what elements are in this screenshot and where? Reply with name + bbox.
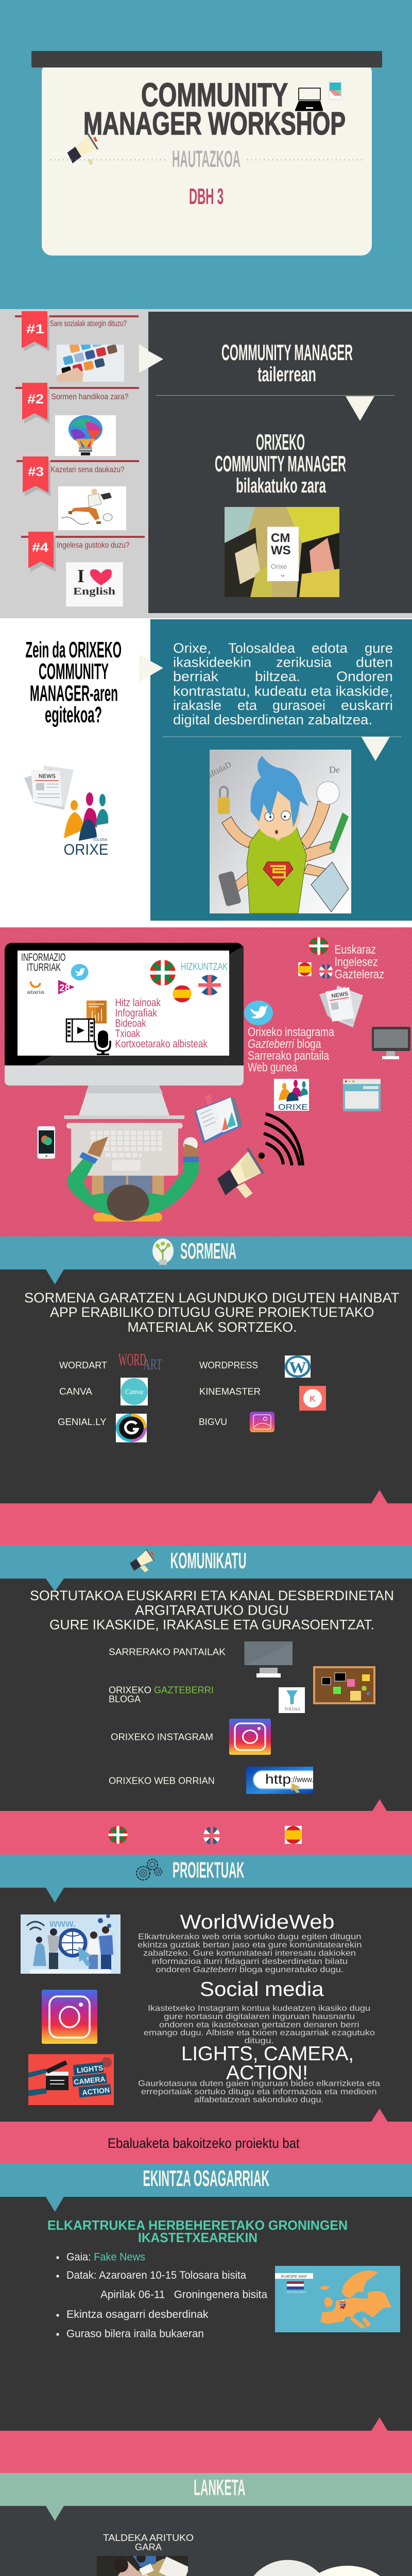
label: canva: CANVA: [59, 1386, 92, 1397]
text: role description: gure: [365, 640, 393, 656]
panel: questions column: [0, 309, 412, 618]
logo: wordart: WORD: [118, 1350, 146, 1369]
heading: orixeko community manager: bilakatuko zara: [236, 474, 326, 497]
ribbon 3: [16, 456, 139, 496]
label: kinemaster: KINEMASTER: [199, 1386, 261, 1397]
logo: Orixe Tolosa: TOLOSA: [93, 838, 108, 842]
logo: 28 tv: [58, 980, 75, 994]
image: lights camera action: LIGHTS: [76, 2063, 104, 2075]
logo: wordpress: W: [289, 1358, 306, 1377]
section band: lanketa: LANKETA: [194, 2475, 245, 2500]
label: screens: SARRERAKO PANTAILAK: [109, 1647, 226, 1657]
list: exchange details: Gaia: Fake News: [66, 2251, 145, 2263]
hands: [88, 1137, 108, 1157]
image: social media keyboard: [57, 345, 124, 382]
heading: role question: egitekoa?: [45, 702, 102, 727]
text: intro: GURE IKASKIDE, IRAKASLE ETA GURASOENTZAT.: [49, 1617, 374, 1632]
question 1: Sare sozialak atsegin dituzu?: [50, 319, 127, 328]
text: web description: ekintza guztiak bertan jaso eta gure komunitatearekin: [138, 1941, 362, 1950]
label: group work: [103, 2533, 194, 2552]
icon: browser window: [343, 1079, 381, 1111]
icon: phone: [329, 81, 341, 99]
icon: newspaper: [24, 766, 74, 810]
panel: komunikatu channels: [0, 1579, 412, 1811]
flag: UK: [198, 975, 221, 995]
hair: [250, 756, 308, 827]
panel: workshop intro: [148, 312, 412, 613]
list: exchange details: Ekintza osagarri desberdinak: [66, 2309, 209, 2320]
title: COMMUNITY: [141, 76, 288, 113]
pointer: pink triangle: [372, 1799, 387, 1811]
heading: role question: COMMUNITY: [39, 659, 109, 684]
body: [67, 1155, 199, 1217]
text: intro: ARGITARATUKO DUGU: [135, 1602, 289, 1618]
person typing: [67, 1137, 199, 1222]
illustration: speech bubbles: [243, 2560, 397, 2576]
text: role description: berriak: [173, 669, 219, 684]
flag: Spain: [173, 985, 192, 1003]
card: [267, 527, 299, 581]
panel: title cover: HAUTAZKOA: [172, 146, 241, 172]
logo: kinemaster: [299, 1386, 326, 1411]
icon: sound waves: [259, 1114, 303, 1165]
cream poster sheet: [42, 62, 372, 256]
image: CMWS collage: Orixe: [271, 563, 287, 570]
arrow: right triangle tip: [150, 661, 163, 675]
label: bigvu: BIGVU: [199, 1417, 227, 1427]
heading: role question: [26, 637, 122, 727]
logo: Orixe Tolosa: [64, 792, 108, 858]
label: information sources: INFORMAZIO: [21, 952, 66, 963]
arrow: intro pointer tip: [148, 351, 163, 368]
section band: ekintza osagarriak: [0, 2164, 412, 2197]
heading: orixeko community manager: [215, 430, 346, 497]
text: video description: Gaurkotasuna duten gaien inguruan bideo elkarrizketa eta: [138, 2079, 380, 2088]
pointer: pink triangle: [371, 2417, 387, 2431]
image: http address bar: [246, 1767, 314, 1794]
text: social description: ondoren eta ikastetxean gertatzen denaren berri: [159, 2021, 359, 2029]
list: publication channels: Orixeko instagrama: [248, 1025, 335, 1039]
panel: title cover: [0, 0, 412, 309]
logo: Tolosa: [279, 1687, 305, 1713]
band: project note: Ebaluaketa bakoitzeko proiektu bat: [108, 2136, 300, 2151]
icon: phone with chat: [37, 1126, 55, 1159]
ribbon 1: [15, 311, 139, 351]
heading: social media: Social media: [200, 1978, 324, 2001]
image: http address bar: ://www.: [291, 1775, 314, 1784]
pencil: [329, 812, 349, 853]
text: social description: [144, 2004, 375, 2045]
list: languages: Gazteleraz: [335, 968, 384, 981]
heading: exchange title: IKASTETXEAREKIN: [138, 2230, 258, 2245]
text: social description: gure nortasun digitalaren inguruan hausnartu: [164, 2012, 355, 2021]
label: instagram: ORIXEKO INSTAGRAM: [111, 1732, 213, 1742]
image: reporter running: [58, 486, 126, 530]
text: intro: APP ERABILIKO DITUGU GURE PROIEKTUETAKO: [50, 1304, 374, 1320]
list: publication channels: Web gunea: [248, 1060, 298, 1075]
logo: canva: Canva: [125, 1388, 143, 1396]
text: video description: [138, 2079, 380, 2105]
text: web description: informazioa iturri fidagarri desberdinetan bilatu: [152, 1957, 348, 1966]
list: exchange details: Datak: Azaroaren 10-15 Tolosara bisita: [66, 2269, 246, 2281]
text: intro: [24, 1290, 400, 1335]
list: publication channels: [248, 1025, 335, 1075]
text: role description: eta: [237, 698, 258, 713]
logo: Orixe small: ORIXE: [278, 1103, 308, 1112]
list: exchange details: Apirilak 06-11 Groningenera bisita: [100, 2289, 267, 2301]
arms: [222, 817, 253, 848]
text: role description: Ondoren: [336, 669, 393, 684]
text: role description: euskarri: [341, 698, 393, 713]
text: video description: alfabetatzean sakonduko dugu.: [194, 2096, 324, 2105]
chair: [93, 1213, 162, 1222]
image: lights camera action: ACTION: [82, 2086, 110, 2097]
image: lights camera action: CAMERA: [73, 2075, 106, 2086]
icon: newspaper on pink: NEWS: [331, 991, 349, 999]
face: [255, 791, 300, 838]
icon: megaphone: [67, 133, 98, 165]
phone: [218, 871, 242, 907]
panel: sormena apps: [0, 1269, 412, 1503]
label: genially: GENIAL.LY: [58, 1417, 107, 1427]
text: role description: edota: [312, 640, 348, 656]
text: social description: ditugu.: [244, 2037, 274, 2045]
image: http address bar: http: [265, 1771, 291, 1787]
pointer: pink triangle: [371, 2108, 387, 2122]
text: role description: gurasoei: [272, 698, 325, 713]
text: web description: [138, 1933, 362, 1974]
list: content formats: Hitz lainoak: [115, 997, 161, 1009]
panel: projects: [0, 1888, 412, 2122]
text: web description: ondoren Gazteberri bloga eguneratuko dugu.: [156, 1965, 344, 1974]
image: multitasking superhero: De: [329, 765, 340, 775]
logo: ataria: ataria: [27, 990, 45, 995]
icon: cork board: [313, 1666, 375, 1704]
text: role description: irakasle: [173, 698, 221, 713]
label: wordpress: WORDPRESS: [199, 1360, 258, 1370]
icon: microphone: [95, 1030, 110, 1055]
list: exchange details: Guraso bilera iraila bukaeran: [66, 2328, 204, 2340]
text: role description: Orixe,: [173, 640, 211, 656]
title: [83, 76, 346, 142]
logo: canva: [121, 1378, 148, 1405]
icon: laptop: [295, 88, 323, 111]
label: blog: [109, 1685, 214, 1704]
label: information sources: [21, 952, 66, 974]
label: group work: GARA: [135, 2542, 162, 2552]
question 3: Kazetari sena daukazu?: [50, 466, 125, 474]
logo: kinemaster: K: [310, 1395, 316, 1403]
section band: lanketa: [0, 2473, 412, 2506]
logo: wordart: ART: [143, 1356, 162, 1373]
icon: film strip: [66, 1019, 94, 1042]
head: [107, 1185, 149, 1221]
heading: lights camera action: ACTION!: [226, 2062, 308, 2084]
text: intro: SORTUTAKOA EUSKARRI ETA KANAL DESBERDINETAN: [30, 1588, 394, 1603]
section band: proiektuak: [0, 1855, 412, 1888]
image: Europe map: [275, 2266, 400, 2332]
list: publication channels: Gazteberri bloga: [248, 1037, 321, 1051]
text: intro: MATERIALAK SORTZEKO.: [128, 1319, 297, 1335]
label: information sources: ITURRIAK: [27, 961, 61, 974]
shield: [263, 862, 293, 886]
image: students around table: [97, 2556, 188, 2576]
text: web description: zabaltzeko. Gure komunitateari interesatu dakioken: [143, 1949, 356, 1958]
flag: UK small: [319, 964, 333, 979]
flag: UK: [203, 1826, 220, 1845]
list: publication channels: Sarrerako pantaila: [248, 1049, 330, 1063]
heading: exchange title: [47, 2217, 348, 2245]
image: creative light bulb: [55, 415, 116, 456]
icon: monitor small: [372, 1027, 410, 1059]
section band: sormena: [0, 1236, 412, 1269]
band: pink divider: [0, 2431, 412, 2473]
heading: worldwideweb: WorldWideWeb: [180, 1911, 335, 1934]
list: content formats: [115, 997, 208, 1050]
panel: role description: [150, 619, 412, 921]
course label: DBH 3: [189, 184, 224, 209]
list: content formats: Bideoak: [115, 1018, 146, 1029]
text: role description: digital desberdinetan zabaltzea.: [173, 712, 372, 727]
icon: chart document: [87, 1001, 107, 1023]
panel: desktop scene: [0, 927, 412, 1236]
ribbon 2: [15, 383, 139, 423]
image: www community: www.: [49, 1918, 76, 1929]
flag: basque top: [309, 937, 329, 955]
panel: lanketa: [0, 2506, 412, 2576]
padlock: [218, 797, 230, 814]
list: languages: Ingelesez: [335, 955, 378, 969]
label: web: ORIXEKO WEB ORRIAN: [109, 1776, 215, 1786]
band: language flags: [0, 1811, 412, 1855]
text: role description: duten: [356, 655, 393, 670]
image: I love English: English: [73, 586, 115, 597]
list: content formats: Infografiak: [115, 1007, 157, 1019]
text: role description: zerikusia: [276, 655, 332, 670]
logo: genially: [116, 1414, 147, 1443]
list: content formats: Txioak: [115, 1028, 140, 1040]
logo: Tolosa: TOLOSA: [284, 1707, 301, 1711]
keyboard laptop: [66, 1123, 183, 1176]
heading: lights camera action: [181, 2043, 354, 2084]
logo: instagram: [229, 1719, 271, 1755]
panel: role: [0, 618, 412, 927]
heading: role question: Zein da ORIXEKO: [26, 637, 122, 663]
image: CMWS collage: WS: [271, 544, 291, 557]
list: languages: Euskaraz: [335, 943, 376, 957]
arrow: down triangle: [346, 396, 374, 421]
pointer: pink triangle: [371, 1490, 387, 1503]
text: role description: [173, 640, 393, 727]
icon: open book: [195, 1093, 242, 1144]
icon: gears: [136, 1859, 162, 1880]
flag: Spain: [285, 1826, 302, 1844]
text: intro: SORMENA GARATZEN LAGUNDUKO DIGUTEN HAINBAT: [24, 1290, 400, 1306]
section band: proiektuak: PROIEKTUAK: [173, 1858, 245, 1883]
logo: wordpress: [285, 1355, 311, 1378]
icon: monitor: [244, 1641, 293, 1677]
text: role description: biltzea.: [255, 669, 300, 684]
section band: sormena: SORMENA: [180, 1239, 236, 1264]
logo: bigvu: [250, 1412, 274, 1432]
question 2: Sormen handikoa zara?: [52, 393, 129, 401]
text: role description: ikaskideekin: [173, 655, 251, 670]
arrow: right triangle: [139, 344, 163, 373]
image: CMWS collage: [225, 507, 339, 597]
heading: exchange title: ELKARTRUKEA HERBEHERETAKO GRONINGEN: [47, 2217, 348, 2233]
label: languages: HIZKUNTZAK: [181, 961, 228, 973]
text: intro: [30, 1588, 394, 1632]
section band: komunikatu: [0, 1546, 412, 1579]
label: group work: TALDEKA ARITUKO: [103, 2533, 194, 2543]
arrow: right triangle: [139, 654, 163, 682]
text: web description: Elkartrukerako web orria sortuko dugu egiten ditugun: [138, 1933, 362, 1941]
section band: komunikatu: KOMUNIKATU: [170, 1548, 247, 1573]
section band: ekintza osagarriak: EKINTZA OSAGARRIAK: [143, 2166, 269, 2191]
monitor: [5, 943, 244, 1119]
logo: ataria: [27, 981, 45, 995]
logo: 28 tv: 28: [59, 983, 70, 994]
icon: tree bulb: [152, 1239, 174, 1265]
logo: Orixe small: [274, 1079, 309, 1112]
band: project note: [0, 2122, 412, 2164]
text: role description: Tolosaldea: [228, 640, 296, 656]
heading: role question: MANAGER-aren: [30, 681, 118, 706]
tablet: [311, 862, 349, 912]
text: video description: erreportaiak sortuko ditugu eta informazioa eta medioen: [141, 2088, 377, 2096]
icon: newspaper: NEWS: [39, 773, 56, 779]
ribbon 3: #3: [28, 465, 44, 479]
band: pink divider: [0, 1503, 412, 1546]
screen: [18, 951, 229, 1056]
text: role description: kontrastatu, kudeatu eta ikaskide,: [173, 684, 393, 699]
panel: exchange: [0, 2197, 412, 2431]
shirt: [247, 826, 306, 913]
image: I love English: [66, 562, 123, 607]
crumpled paper: [317, 782, 339, 804]
heading: tailerrean: tailerrean: [258, 363, 316, 386]
label: wordart: WORDART: [59, 1360, 107, 1370]
image: Europe map: NETHERLANDS: [287, 2291, 306, 2294]
label: blog: BLOGA: [109, 1694, 141, 1704]
logo: Orixe Tolosa: ORIXE: [64, 841, 108, 858]
flag: Spain square: [298, 962, 312, 976]
image: lights camera action: [28, 2054, 114, 2105]
image: Europe map: EUROPE MAP: [281, 2274, 307, 2279]
icon: twitter: [244, 1001, 273, 1025]
icon: newspaper on pink: [319, 986, 363, 1027]
heading: lights camera action: LIGHTS, CAMERA,: [181, 2043, 354, 2065]
question 4: Ingelesa gustoko duzu?: [57, 541, 130, 550]
image: CMWS collage: CM: [271, 531, 290, 545]
logo: instagram large: [42, 1990, 97, 2044]
image: multitasking superhero: [207, 750, 351, 913]
icon: megaphone large: [217, 1148, 263, 1198]
icon: twitter small: [71, 964, 89, 980]
icon: megaphone: [130, 1549, 154, 1572]
ribbon 2: #2: [27, 392, 44, 406]
dark poster bar: [31, 51, 382, 67]
text: social description: Ikastetxeko Instagram kontua kudeatzen ikasiko dugu: [148, 2004, 370, 2013]
ribbon 4: [21, 532, 145, 572]
heading: orixeko community manager: ORIXEKO: [256, 430, 305, 455]
image: www community: [21, 1914, 121, 1974]
flag: basque: [108, 1826, 128, 1844]
flag: basque badge: [150, 960, 176, 986]
arrow: down triangle: [362, 737, 390, 761]
image: multitasking superhero: aRidaD: [207, 760, 233, 780]
image: I love English: I: [77, 566, 84, 586]
list: exchange details: [56, 2251, 267, 2340]
list: content formats: Kortxoetarako albisteak: [115, 1038, 208, 1050]
text: social description: emango dugu. Albiste eta txioen ezaugarriak ezagutuko: [144, 2029, 375, 2037]
ribbon 4: #4: [32, 540, 48, 555]
ribbon 1: #1: [26, 322, 44, 336]
label: blog: ORIXEKO GAZTEBERRI: [109, 1685, 214, 1696]
list: languages: [335, 943, 384, 981]
